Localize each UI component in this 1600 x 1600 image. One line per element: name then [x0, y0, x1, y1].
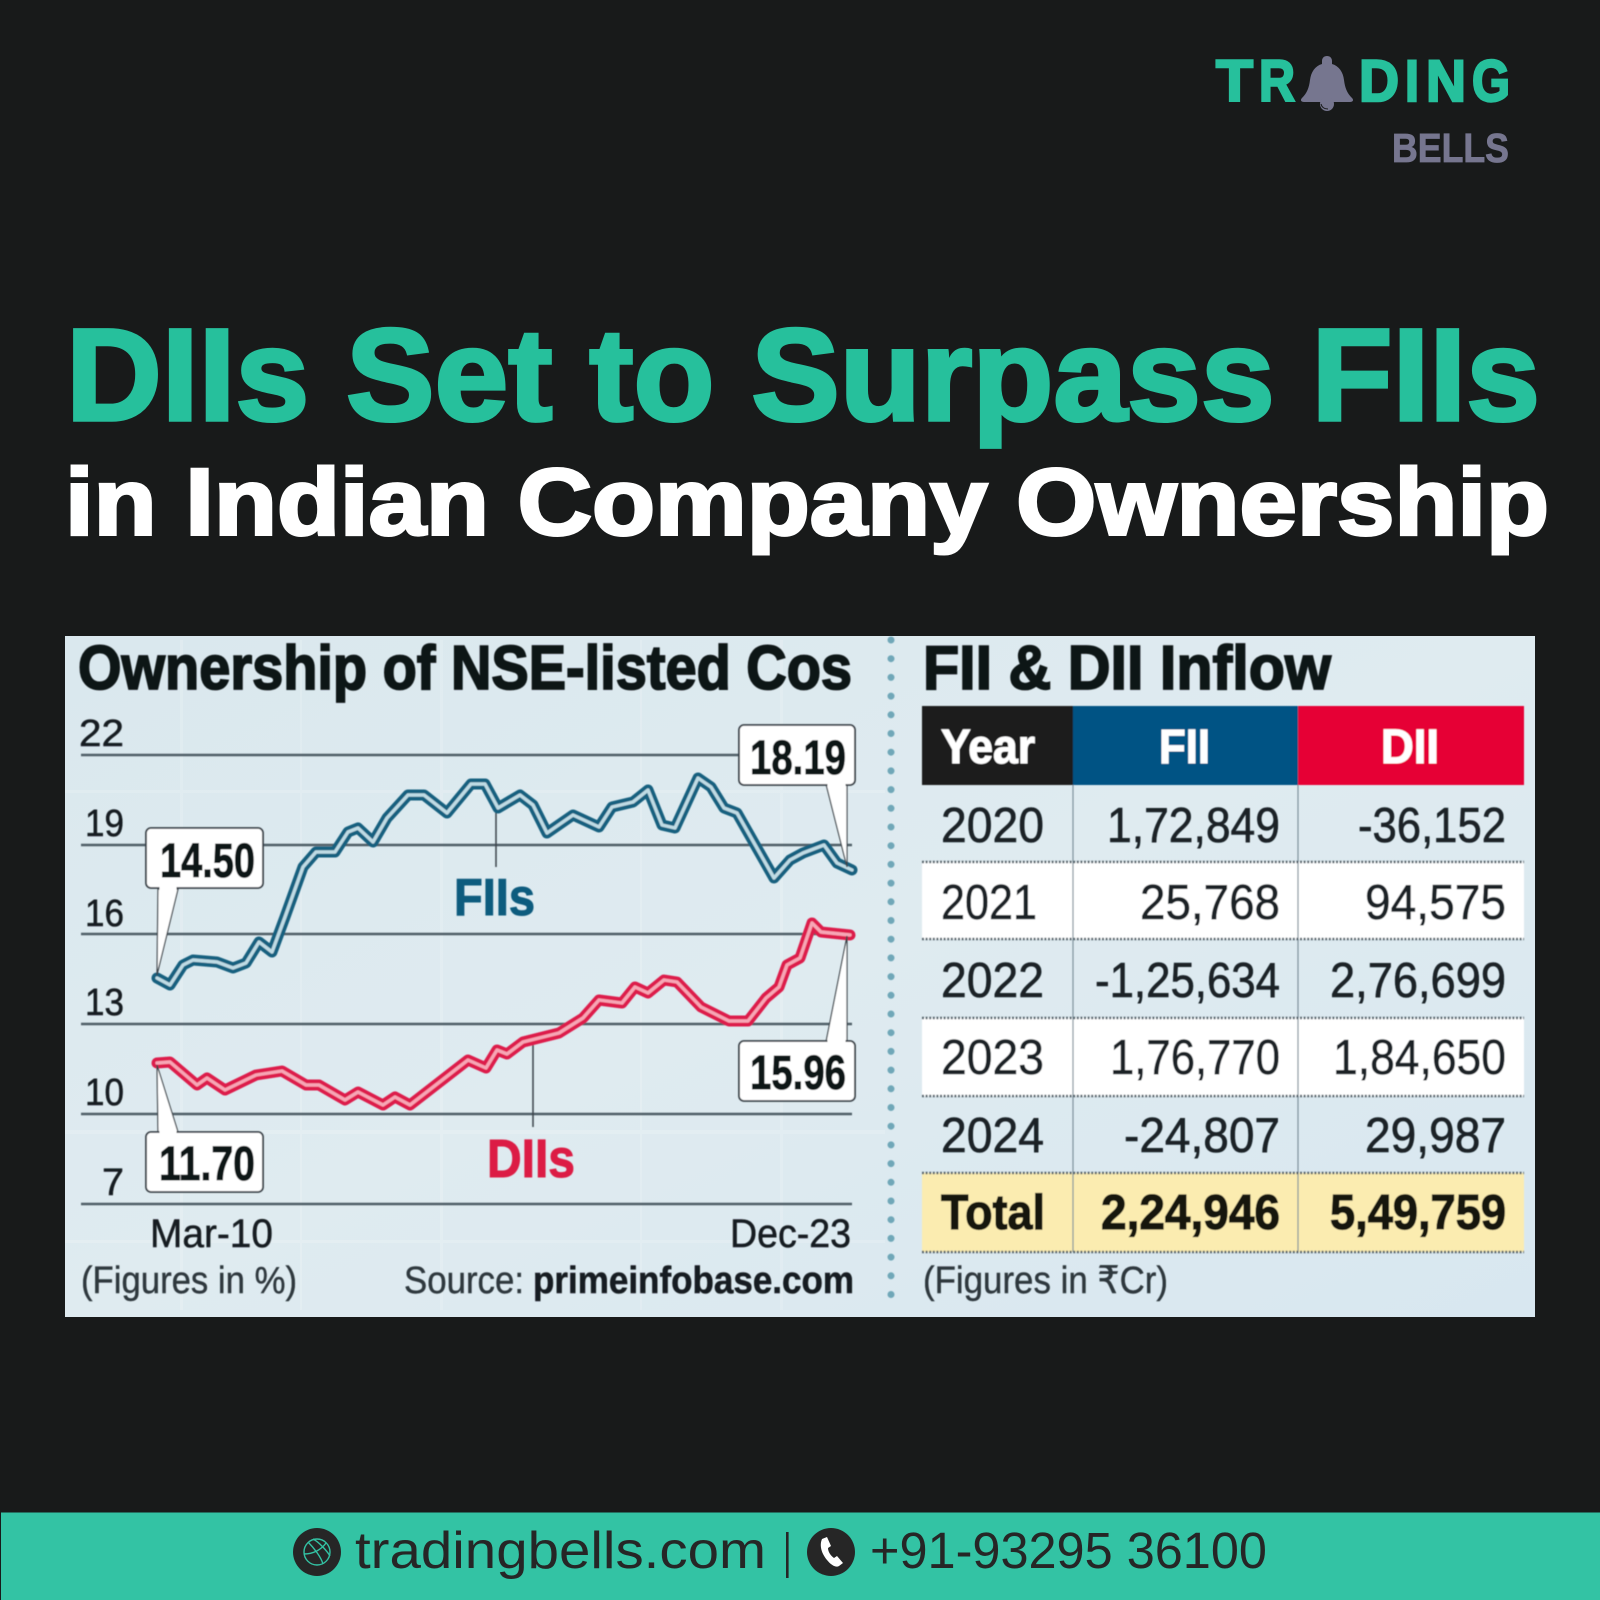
y axis labels: 19 [85, 803, 124, 845]
chart: ownership of NSE-listed companies [78, 634, 855, 1302]
separator [786, 1532, 789, 1578]
icon: bell [1301, 56, 1353, 111]
y axis labels: 10 [85, 1072, 124, 1114]
source: Source: [404, 1260, 524, 1302]
line: FIIs [157, 778, 852, 985]
y axis labels [79, 713, 124, 1204]
row: 2021: 94,575 [1365, 876, 1506, 930]
phone text: +91-93295 36100 [870, 1522, 1267, 1579]
logo word: BELLS: BELLS [1392, 125, 1509, 171]
row: 2021 [941, 876, 1506, 930]
table heading: FII & DII Inflow [923, 634, 1332, 703]
row: 2020: 1,72,849 [1107, 799, 1280, 853]
y axis labels: 22 [79, 713, 124, 755]
title line 1: DIIs Set to Surpass FIIs [66, 301, 1540, 448]
callout: 14.50 [146, 828, 263, 975]
logo word: DING: G [1472, 49, 1510, 114]
row: total: Total [941, 1186, 1045, 1240]
row: total [941, 1186, 1506, 1240]
row: 2023: 1,84,650 [1333, 1031, 1506, 1085]
callout: 11.70 [146, 1065, 263, 1192]
line: DIIs [157, 923, 850, 1105]
callout: 14.50: 14.50 [160, 835, 255, 888]
logo word: DING: D [1359, 49, 1399, 114]
row: 2020 [941, 799, 1506, 853]
dotted divider [888, 640, 894, 1298]
label: DIIs: DIIs [487, 1129, 575, 1189]
note: figures in percent: (Figures in %) [81, 1260, 297, 1302]
icon: phone [807, 1528, 855, 1576]
table header: DII [1381, 721, 1439, 774]
table row backgrounds [922, 862, 1524, 1252]
row: 2024 [941, 1109, 1506, 1163]
table rules [922, 785, 1524, 1252]
row: 2024: -24,807 [1124, 1109, 1280, 1163]
callout: 11.70: 11.70 [159, 1138, 255, 1191]
logo word: DING: I [1405, 49, 1419, 114]
panel background [65, 636, 1535, 1317]
source [404, 1260, 854, 1302]
callout: 15.96 [739, 936, 855, 1101]
website text: tradingbells.com [355, 1522, 766, 1580]
logo word: TR: T [1216, 49, 1253, 114]
row: 2020: -36,152 [1358, 799, 1506, 853]
table header: FII [1159, 721, 1210, 774]
gridlines [81, 755, 852, 1204]
icon: website globe [293, 1528, 341, 1576]
chart heading: Ownership of NSE-listed Cos [78, 634, 852, 703]
note: figures in crore: (Figures in ₹Cr) [923, 1260, 1168, 1302]
logo word: TR [1216, 49, 1295, 114]
row: 2023 [941, 1031, 1506, 1085]
row: 2022: -1,25,634 [1095, 954, 1280, 1008]
row: 2022 [941, 954, 1506, 1008]
label: FIIs: FIIs [454, 869, 535, 927]
logo: Trading Bells [1216, 49, 1510, 171]
table: FII and DII inflow [922, 634, 1524, 1302]
row: total: 5,49,759 [1330, 1186, 1506, 1240]
row: 2024: 29,987 [1365, 1109, 1506, 1163]
row: 2020: 2020 [941, 799, 1044, 853]
row: 2023: 1,76,770 [1110, 1031, 1280, 1085]
callout: 18.19: 18.19 [750, 732, 846, 785]
row: 2021: 2021 [941, 876, 1037, 930]
row: 2022: 2,76,699 [1330, 954, 1506, 1008]
row: total: 2,24,946 [1101, 1186, 1280, 1240]
row: 2024: 2024 [941, 1109, 1044, 1163]
y axis labels: 16 [85, 893, 124, 935]
row: 2022: 2022 [941, 954, 1044, 1008]
FII leader line [495, 808, 497, 867]
logo word: DING: N [1426, 49, 1466, 114]
x axis label: Mar-10: Mar-10 [150, 1212, 273, 1256]
x axis label: Dec-23: Dec-23 [730, 1212, 851, 1256]
logo word: DING [1359, 49, 1510, 114]
callout: 15.96: 15.96 [750, 1047, 846, 1100]
DII leader line [532, 1045, 534, 1127]
source: primeinfobase.com [533, 1260, 854, 1302]
table header: Year [941, 721, 1035, 774]
logo word: TR: R [1259, 49, 1295, 114]
table header [922, 706, 1524, 785]
panel: newspaper graphic [65, 634, 1535, 1317]
callout: 18.19 [739, 725, 855, 867]
row: 2021: 25,768 [1140, 876, 1280, 930]
title [65, 301, 1549, 556]
title line 2: in Indian Company Ownership [65, 450, 1549, 556]
y axis labels: 13 [85, 982, 124, 1024]
row: 2023: 2023 [941, 1031, 1044, 1085]
footer bar [1, 1512, 1600, 1600]
y axis labels: 7 [102, 1162, 124, 1204]
